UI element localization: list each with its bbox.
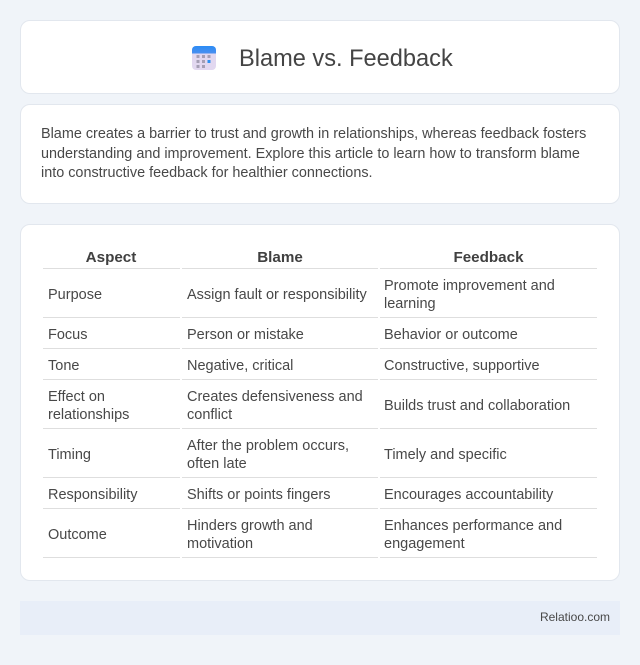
cell: Focus, Feedback: Behavior or outcome (384, 327, 518, 343)
row: Effect on relationships (48, 389, 129, 423)
panel: introduction (20, 104, 620, 204)
cell: Focus, Blame: Person or mistake (187, 327, 304, 343)
table header: Feedback: Feedback (453, 249, 524, 266)
row: Focus: Focus (48, 327, 88, 343)
cell: Purpose, Feedback: Promote improvement and (384, 278, 555, 294)
cell: Outcome, Feedback: Enhances performance and (384, 518, 562, 534)
panel: title card (20, 20, 620, 94)
cell: Effect, Blame: Creates defensiveness and (187, 389, 363, 405)
row: Outcome: Outcome (48, 527, 107, 543)
cell: Timing, Blame: often late (187, 456, 247, 472)
cell: Purpose, Blame: Assign fault or responsibility (187, 287, 367, 303)
cell: Outcome, Blame: Hinders growth and (187, 518, 313, 534)
cell: Outcome, Feedback: engagement (384, 536, 465, 552)
cell: Responsibility, Blame: Shifts or points fingers (187, 487, 330, 503)
cell: Outcome, Feedback (384, 518, 562, 552)
row: Purpose: Purpose (48, 287, 102, 303)
cell: Effect, Feedback: Builds trust and collaboration (384, 398, 570, 414)
table header: Aspect: Aspect (86, 249, 136, 266)
row: Timing: Timing (48, 447, 91, 463)
row: Effect on relationships: Effect on (48, 389, 105, 405)
cell: Timing, Blame (187, 438, 349, 472)
cell: Tone, Feedback: Constructive, supportive (384, 358, 540, 374)
row: Responsibility: Responsibility (48, 487, 137, 503)
cell: Timing, Feedback: Timely and specific (384, 447, 507, 463)
cell: Responsibility, Feedback: Encourages accountability (384, 487, 553, 503)
title: Blame vs. Feedback (239, 46, 453, 72)
cell: Outcome, Blame: motivation (187, 536, 253, 552)
cell: Effect, Blame: conflict (187, 407, 232, 423)
footer bar (20, 601, 620, 635)
text block: introduction: into constructive feedback for healthier connections. (41, 165, 373, 181)
row: Effect on relationships: relationships (48, 407, 129, 423)
text block: introduction: understanding and improvement. Explore this article to learn how to transform blame (41, 146, 580, 162)
cell: Tone, Blame: Negative, critical (187, 358, 293, 374)
row: Tone: Tone (48, 358, 79, 374)
panel: comparison table (20, 224, 620, 581)
icon: calendar (192, 46, 216, 70)
cell: Timing, Blame: After the problem occurs, (187, 438, 349, 454)
cell: Purpose, Feedback: learning (384, 296, 436, 312)
cell: Purpose, Feedback (384, 278, 555, 312)
footer credit: Relatioo.com (540, 610, 610, 624)
cell: Outcome, Blame (187, 518, 313, 552)
table header: Blame: Blame (257, 249, 303, 266)
text block: introduction (41, 126, 586, 181)
text block: introduction: Blame creates a barrier to trust and growth in relationships, whereas feedback fosters (41, 126, 586, 142)
cell: Effect, Blame (187, 389, 363, 423)
